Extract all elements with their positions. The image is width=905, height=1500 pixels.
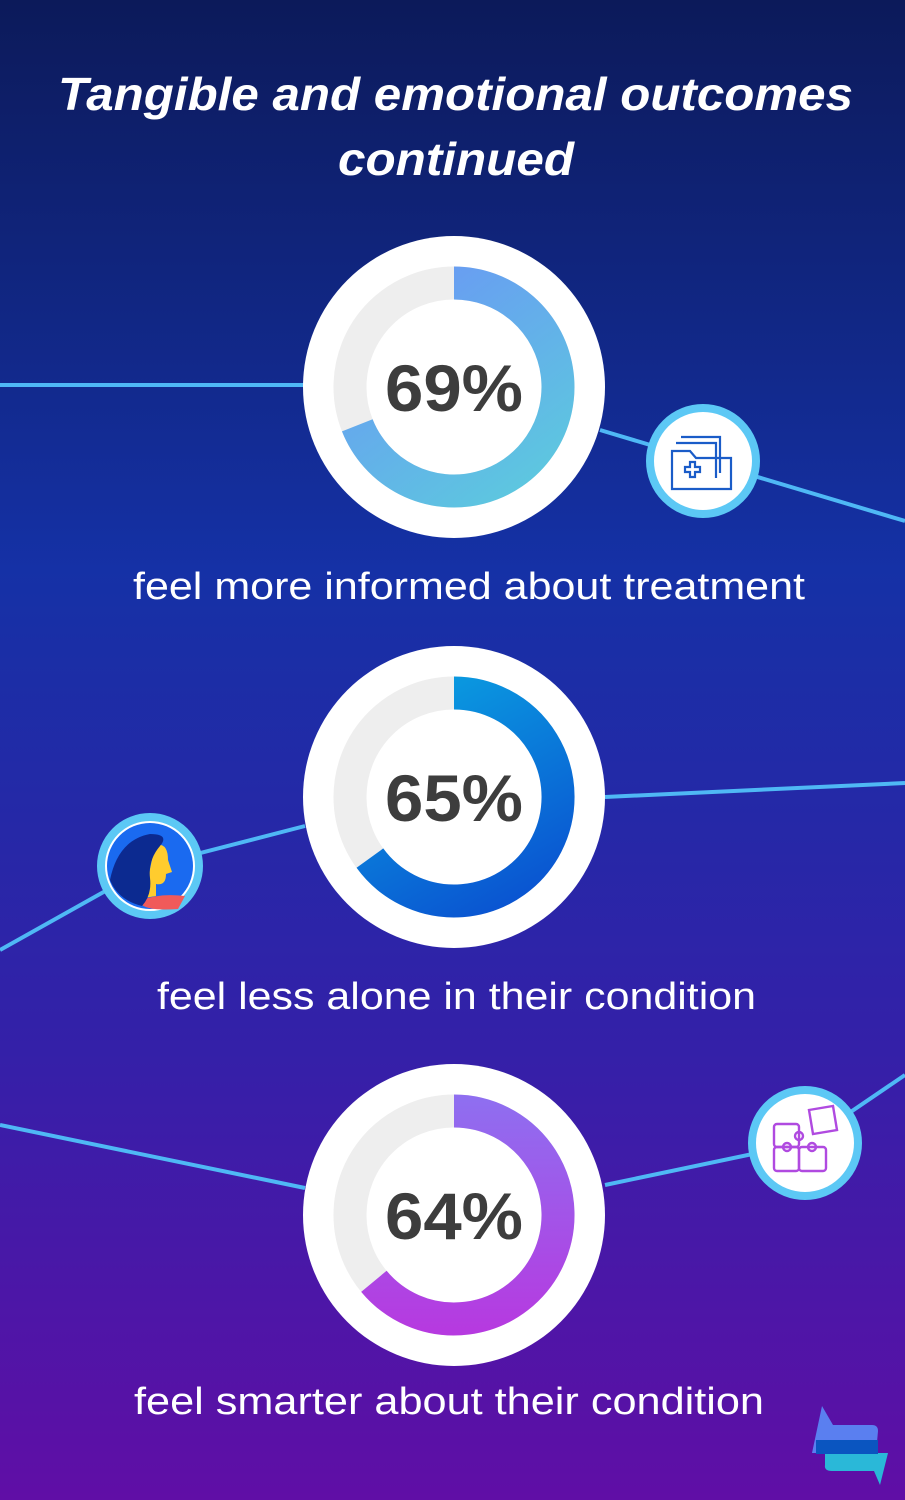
- label 1: feel more informed about treatment: [133, 566, 805, 608]
- title: continued: [338, 133, 575, 185]
- label 3: feel smarter about their condition: [134, 1381, 764, 1423]
- icon: medical folder: [650, 408, 756, 514]
- donut: 65%: 65%: [385, 761, 523, 835]
- label 2: feel less alone in their condition: [157, 976, 756, 1018]
- donut: 65%: [303, 646, 605, 948]
- title: [58, 68, 853, 185]
- icon: woman: [101, 817, 199, 915]
- donut: 64%: 64%: [385, 1179, 523, 1253]
- donut: 64%: [303, 1064, 605, 1366]
- icon: puzzle: [752, 1090, 858, 1196]
- logo: [812, 1406, 888, 1485]
- donut: 69%: 69%: [385, 351, 523, 425]
- title: Tangible and emotional outcomes: [58, 68, 853, 120]
- donut: 69%: [303, 236, 605, 538]
